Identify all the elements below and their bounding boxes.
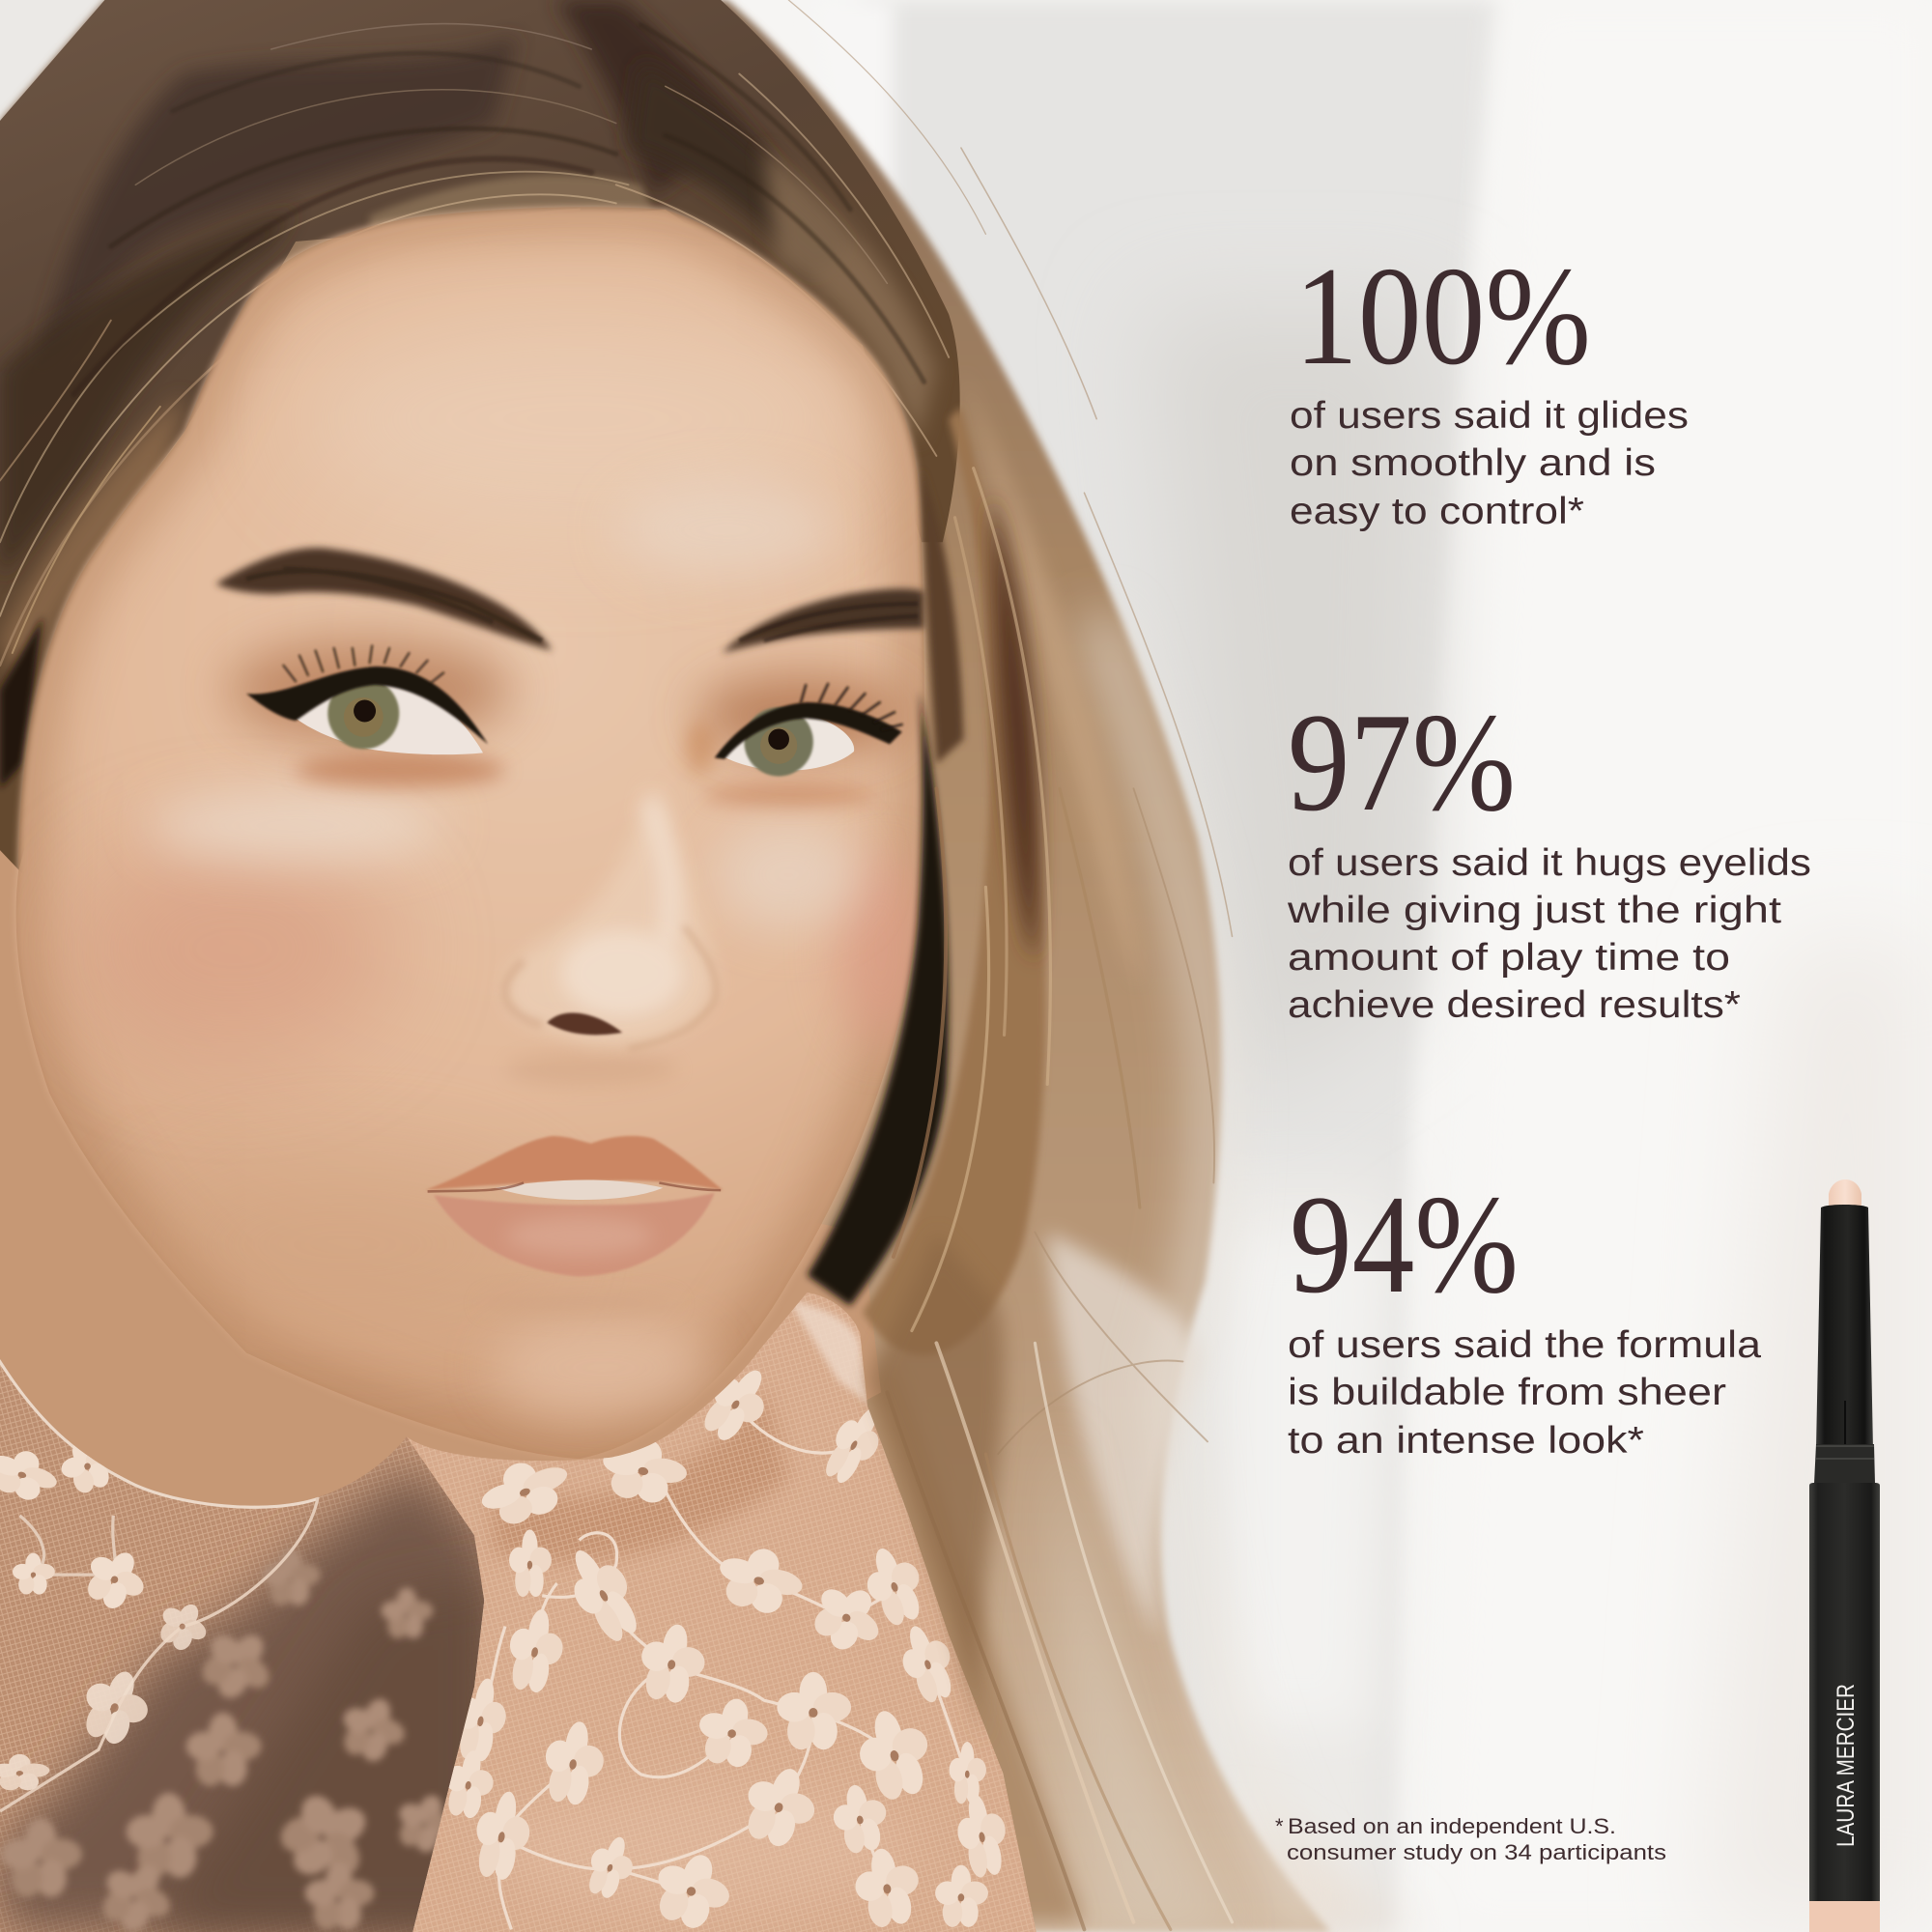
description 97%: while giving just the right — [1287, 890, 1781, 931]
brand label: LAURA MERCIER — [1833, 1684, 1860, 1847]
hair: outer translucent lengths — [0, 0, 1331, 1932]
description 94%: to an intense look* — [1288, 1420, 1644, 1462]
muted flowers in shadow — [1, 1548, 463, 1932]
collar — [1814, 1444, 1875, 1484]
lace: body collar — [0, 1350, 493, 1932]
footnote: Based on an independent U.S. — [1288, 1814, 1616, 1838]
crown strands — [0, 24, 949, 666]
stat: 100% — [1290, 238, 1689, 532]
lips — [425, 1136, 724, 1316]
neck — [0, 850, 881, 1602]
left eye — [228, 639, 511, 787]
hair: front lengths beside the cheek — [807, 407, 1233, 1929]
peach end cap — [1809, 1901, 1880, 1932]
chin light — [493, 1319, 715, 1417]
hair: crown and left side — [0, 0, 960, 899]
description 100% — [1290, 395, 1689, 532]
description 100%: easy to control* — [1290, 491, 1584, 532]
forehead light — [296, 308, 863, 529]
description 97%: of users said it hugs eyelids — [1288, 842, 1811, 884]
cheek highlight left — [148, 788, 443, 863]
cheek highlight right — [715, 819, 863, 930]
footnote: consumer study on 34 participants — [1287, 1840, 1666, 1864]
vines — [469, 1405, 982, 1929]
description 94%: is buildable from sheer — [1288, 1372, 1726, 1413]
cheek blush right — [837, 850, 925, 1047]
lace flowers — [481, 1463, 567, 1524]
footnote — [1275, 1814, 1666, 1864]
left eyebrow — [215, 548, 552, 650]
lower face warm shade — [135, 1158, 554, 1331]
number 97%: 97% — [1288, 684, 1516, 840]
right eye — [685, 675, 906, 806]
description 97% — [1287, 842, 1811, 1026]
lower barrel — [1809, 1483, 1880, 1901]
number 100%: 100% — [1294, 238, 1591, 394]
nose — [504, 788, 717, 1087]
footnote: * — [1275, 1814, 1284, 1838]
upper barrel — [1816, 1205, 1873, 1449]
stat: 97% — [1287, 684, 1811, 1026]
crayon tip — [1829, 1179, 1861, 1208]
description 97%: amount of play time to — [1288, 937, 1730, 979]
description 94%: of users said the formula — [1288, 1324, 1761, 1366]
right eyebrow — [722, 588, 924, 653]
number 94%: 94% — [1290, 1166, 1519, 1322]
face skin — [16, 207, 925, 1459]
lace: wrist cuff under chin — [401, 1288, 1041, 1932]
description 94% — [1288, 1324, 1761, 1462]
description 100%: on smoothly and is — [1290, 442, 1656, 484]
description 97%: achieve desired results* — [1288, 984, 1741, 1026]
cheek blush left — [74, 838, 394, 1060]
description 100%: of users said it glides — [1290, 395, 1689, 437]
neckline trim and vines — [0, 1359, 318, 1506]
soft edge shading around hairline and jaw — [16, 207, 924, 1459]
stat: 94% — [1288, 1166, 1761, 1462]
product: eyeshadow stick — [1809, 1179, 1880, 1932]
